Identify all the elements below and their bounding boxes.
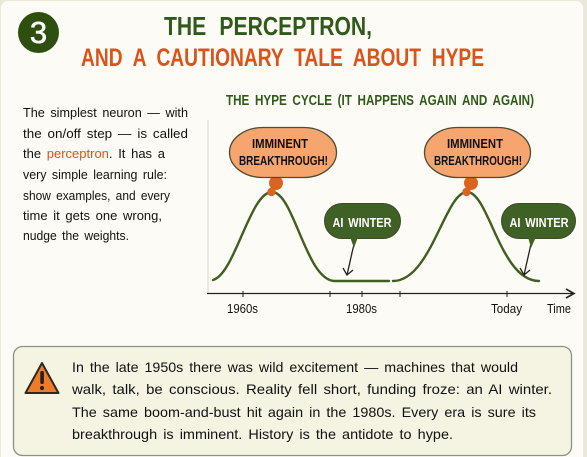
curve: second hype cycle — [393, 192, 539, 281]
axis labels — [227, 302, 571, 316]
icon: warning triangle — [26, 363, 58, 393]
text block: perceptron intro: show examples, and every — [23, 189, 171, 203]
text block: perceptron intro: the perceptron. It has a — [23, 147, 165, 161]
text block: history of hype: walk, talk, be conscious. Reality fell short, funding froze: an AI winter. — [71, 381, 552, 397]
callout: AI winter 1: AI WINTER — [332, 216, 392, 230]
callout: imminent breakthrough 1 — [230, 128, 336, 196]
text block: perceptron intro: nudge the weights. — [23, 229, 129, 243]
callout: AI winter 2 — [502, 204, 576, 275]
callout: imminent breakthrough 1: IMMINENT — [252, 136, 308, 151]
icon: number badge — [18, 12, 59, 53]
text block: history of hype: In the late 1950s there was wild excitement — machines that would — [72, 359, 518, 375]
text block: history of hype: breakthrough is imminent. History is the antidote to hype. — [72, 426, 453, 442]
text block: perceptron intro: the on/off step — is called — [23, 127, 188, 141]
text block: perceptron intro: time it gets one wrong, — [23, 209, 162, 223]
x axis arrow — [207, 289, 574, 298]
callout: imminent breakthrough 2: IMMINENT — [447, 136, 503, 151]
callout: AI winter 2: AI WINTER — [510, 216, 568, 230]
text block: perceptron intro: The simplest neuron — with — [23, 106, 188, 120]
title: THE PERCEPTRON, — [164, 11, 372, 41]
text block: history of hype — [71, 359, 552, 442]
axis labels: Time — [547, 302, 571, 316]
title — [81, 11, 484, 72]
chart: hype cycle — [207, 120, 576, 316]
callout: imminent breakthrough 2: BREAKTHROUGH! — [434, 153, 522, 168]
axis labels: 1980s — [346, 302, 377, 316]
text block: perceptron intro — [23, 106, 188, 243]
axis labels: Today — [491, 302, 523, 316]
text block: history of hype: The same boom-and-bust hit again in the 1980s. Every era is sure its — [72, 404, 536, 420]
text block: perceptron intro: very simple learning rule: — [23, 168, 167, 182]
panel: history callout — [14, 346, 572, 456]
curve: first hype cycle — [213, 192, 389, 281]
icon: number badge: 3 — [30, 15, 47, 50]
y axis — [207, 120, 209, 293]
axis labels: 1960s — [227, 302, 258, 316]
callout: imminent breakthrough 2 — [424, 128, 530, 196]
callout: AI winter 1 — [324, 204, 400, 275]
callout: imminent breakthrough 1: BREAKTHROUGH! — [239, 153, 328, 168]
